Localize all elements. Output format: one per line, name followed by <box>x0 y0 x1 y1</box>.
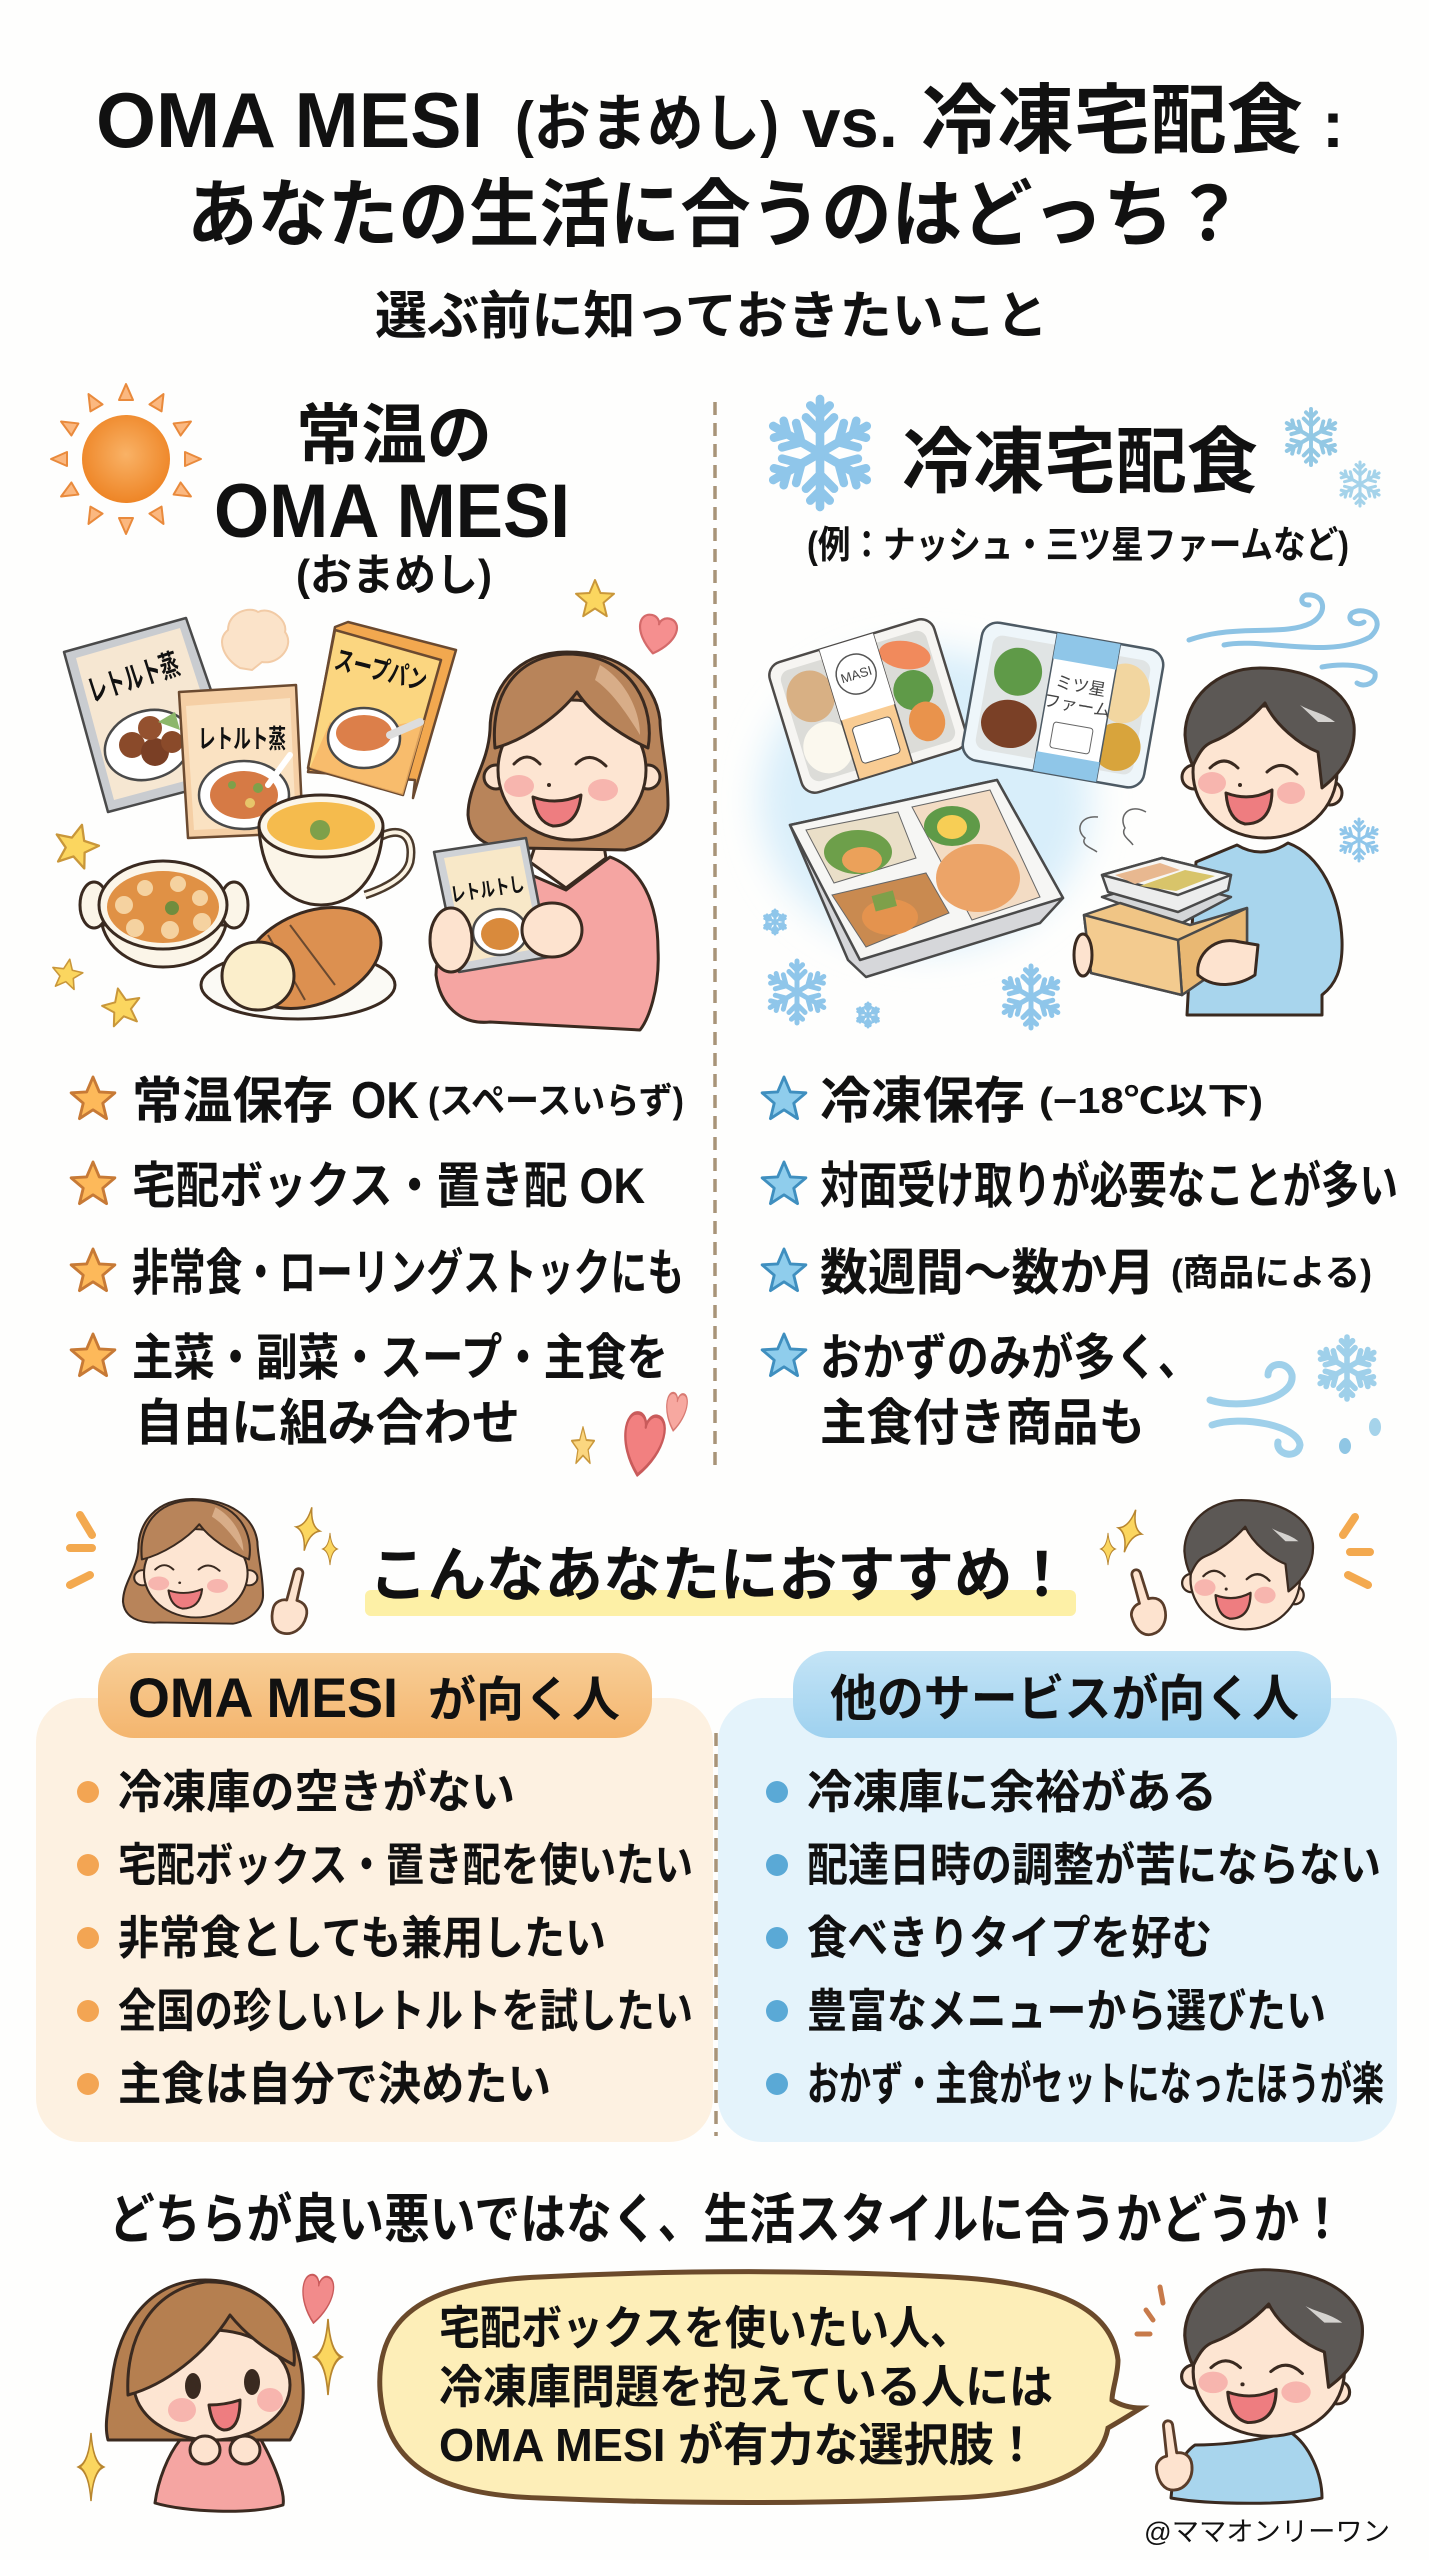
panel: other services suited <box>718 1651 1397 2142</box>
man pointing hand <box>1152 2419 1194 2492</box>
title <box>96 76 1344 256</box>
boy sweater <box>1187 843 1342 1015</box>
feature: storage: 常温保存 <box>132 1073 333 1129</box>
woman <box>430 652 668 1030</box>
feature: combination <box>71 1330 668 1451</box>
list: right features <box>762 1073 1398 1451</box>
illustration: shelf-stable meals and woman <box>50 580 679 1030</box>
section heading: こんなあなたにおすすめ！ <box>369 1542 1071 1609</box>
tray 2: ファーム <box>1042 691 1112 721</box>
woman sweater <box>436 857 658 1030</box>
title line 2: あなたの生活に合うのはどっち？ <box>187 173 1244 256</box>
item 1: 冷凍庫に余裕がある <box>807 1766 1217 1818</box>
item 5: 主食は自分で決めたい <box>118 2058 551 2110</box>
item 1: 冷凍庫の空きがない <box>118 1766 515 1818</box>
icon: sun <box>51 384 201 534</box>
panel background <box>718 1698 1397 2142</box>
panel: OMA MESI suited <box>36 1653 713 2142</box>
feature: emergency <box>71 1245 684 1301</box>
feature: combination: 主菜・副菜・スープ・主食を <box>132 1330 668 1386</box>
subtitle: 選ぶ前に知っておきたいこと <box>375 288 1048 346</box>
soup box <box>308 622 456 798</box>
boy hands <box>1074 934 1092 976</box>
section header: recommendations <box>70 1499 1370 1638</box>
heading examples: (例：ナッシュ・三ツ星ファームなど) <box>807 525 1349 567</box>
woman face <box>134 2330 290 2440</box>
woman head <box>468 652 668 850</box>
boy <box>1074 668 1354 1015</box>
feature: side dishes <box>762 1330 1200 1451</box>
bread on plate <box>201 888 396 1028</box>
soup box: スープパン <box>332 645 430 697</box>
title line 1: vs. <box>802 84 898 162</box>
illustration: frozen meals and boy <box>760 595 1380 1028</box>
heading line 常温の: 常温の <box>296 398 492 472</box>
man body <box>1171 2432 1322 2503</box>
highlight bar <box>365 1590 1076 1616</box>
feature: frozen storage: 冷凍保存 <box>820 1073 1025 1129</box>
woman bottom <box>106 2280 303 2511</box>
decoration: cold wind and snowflake <box>1210 1337 1381 1454</box>
wind swirls <box>1189 595 1377 685</box>
divider top <box>713 402 717 1465</box>
pouch 1: レトルト蒸 <box>84 648 184 709</box>
woman cheeks <box>168 2398 196 2422</box>
feature: storage: (スペースいらず) <box>428 1080 684 1121</box>
stars and heart decoration <box>50 580 679 1028</box>
credit: @ママオンリーワン <box>1144 2517 1390 2547</box>
feature: combination: 自由に組み合わせ <box>135 1395 520 1451</box>
man head <box>1182 2270 1362 2436</box>
feature: emergency: 非常食・ローリングストックにも <box>132 1245 684 1301</box>
pill heading <box>793 1651 1331 1738</box>
pill heading: が向く人 <box>428 1674 620 1727</box>
item 3: 非常食としても兼用したい <box>118 1912 606 1964</box>
soup bowl <box>80 861 248 967</box>
title line 1: (おまめし) <box>515 90 779 159</box>
heading: right column <box>807 423 1349 567</box>
pill heading: 他のサービスが向く人 <box>830 1671 1299 1727</box>
heading line OMA MESI: OMA MESI <box>214 469 570 554</box>
feature: side dishes: 主食付き商品も <box>820 1395 1145 1451</box>
icons: snowflakes header <box>766 399 1382 507</box>
feature: shelf life: (商品による) <box>1171 1252 1372 1293</box>
pouch 2: レトルト蒸 <box>198 724 286 754</box>
pouch 2 <box>179 685 303 838</box>
woman hair <box>106 2280 303 2440</box>
hands <box>430 908 472 972</box>
man bottom <box>1137 2270 1362 2503</box>
decoration: hearts and star <box>572 1392 688 1478</box>
steam curls <box>1080 809 1146 852</box>
item 3: 食べきりタイプを好む <box>807 1912 1212 1964</box>
woman body <box>155 2438 283 2511</box>
title line 1: 冷凍宅配食 <box>921 79 1303 164</box>
woman mouth <box>209 2400 240 2430</box>
steam cloud <box>222 610 288 670</box>
panel background <box>36 1698 713 2142</box>
soup cup <box>259 795 411 905</box>
woman hands <box>190 2436 220 2464</box>
held pouch: レトルトし <box>449 874 526 907</box>
title line 1: : <box>1322 87 1344 161</box>
pill heading: OMA MESI <box>128 1666 398 1729</box>
blue wash <box>760 650 1090 950</box>
feature: storage <box>71 1072 684 1130</box>
pouch 1 <box>64 618 241 812</box>
decoration: heart and sparkles <box>79 2274 341 2501</box>
feature: shelf life: 数週間〜数か月 <box>820 1245 1155 1301</box>
pill heading <box>98 1653 652 1738</box>
cardboard box <box>1084 903 1247 995</box>
title line 1: OMA MESI <box>96 76 483 164</box>
tray 1 <box>766 616 970 796</box>
bubble line 3: OMA MESI が有力な選択肢！ <box>439 2419 1039 2471</box>
divider lower <box>714 1733 718 2136</box>
heading: left column <box>214 398 570 600</box>
speech bubble <box>380 2272 1141 2502</box>
tray 3 <box>790 780 1063 977</box>
bubble line 2: 冷凍庫問題を抱えている人には <box>439 2361 1053 2413</box>
heading line 冷凍宅配食: 冷凍宅配食 <box>902 423 1258 503</box>
feature: delivery: 宅配ボックス・置き配 OK <box>132 1158 645 1214</box>
accent ticks <box>1137 2287 1163 2334</box>
stacked trays <box>1102 858 1231 925</box>
heading line reading: (おまめし) <box>296 551 492 600</box>
feature: frozen storage <box>762 1073 1263 1129</box>
item 4: 全国の珍しいレトルトを試したい <box>118 1985 693 2037</box>
woman mini icon <box>70 1499 337 1638</box>
item 4: 豊富なメニューから選びたい <box>807 1985 1326 2037</box>
held pouch <box>434 838 549 972</box>
bubble line 1: 宅配ボックスを使いたい人、 <box>439 2302 971 2354</box>
feature: frozen storage: (−18℃以下) <box>1039 1080 1263 1121</box>
tray 1: MASI <box>839 663 874 686</box>
snowflakes scattered <box>763 819 1380 1028</box>
tray 2: ミツ星 <box>1054 672 1107 700</box>
tray 2 <box>960 620 1166 790</box>
woman neck <box>530 840 606 888</box>
list: left features <box>71 1072 684 1451</box>
feature: shelf life <box>762 1245 1372 1301</box>
feature: side dishes: おかずのみが多く、 <box>820 1330 1200 1386</box>
item 2: 宅配ボックス・置き配を使いたい <box>118 1839 693 1891</box>
woman eyes <box>185 2373 201 2399</box>
feature: storage: OK <box>351 1072 419 1130</box>
boy head <box>1182 668 1354 838</box>
man mini icon <box>1101 1500 1370 1638</box>
